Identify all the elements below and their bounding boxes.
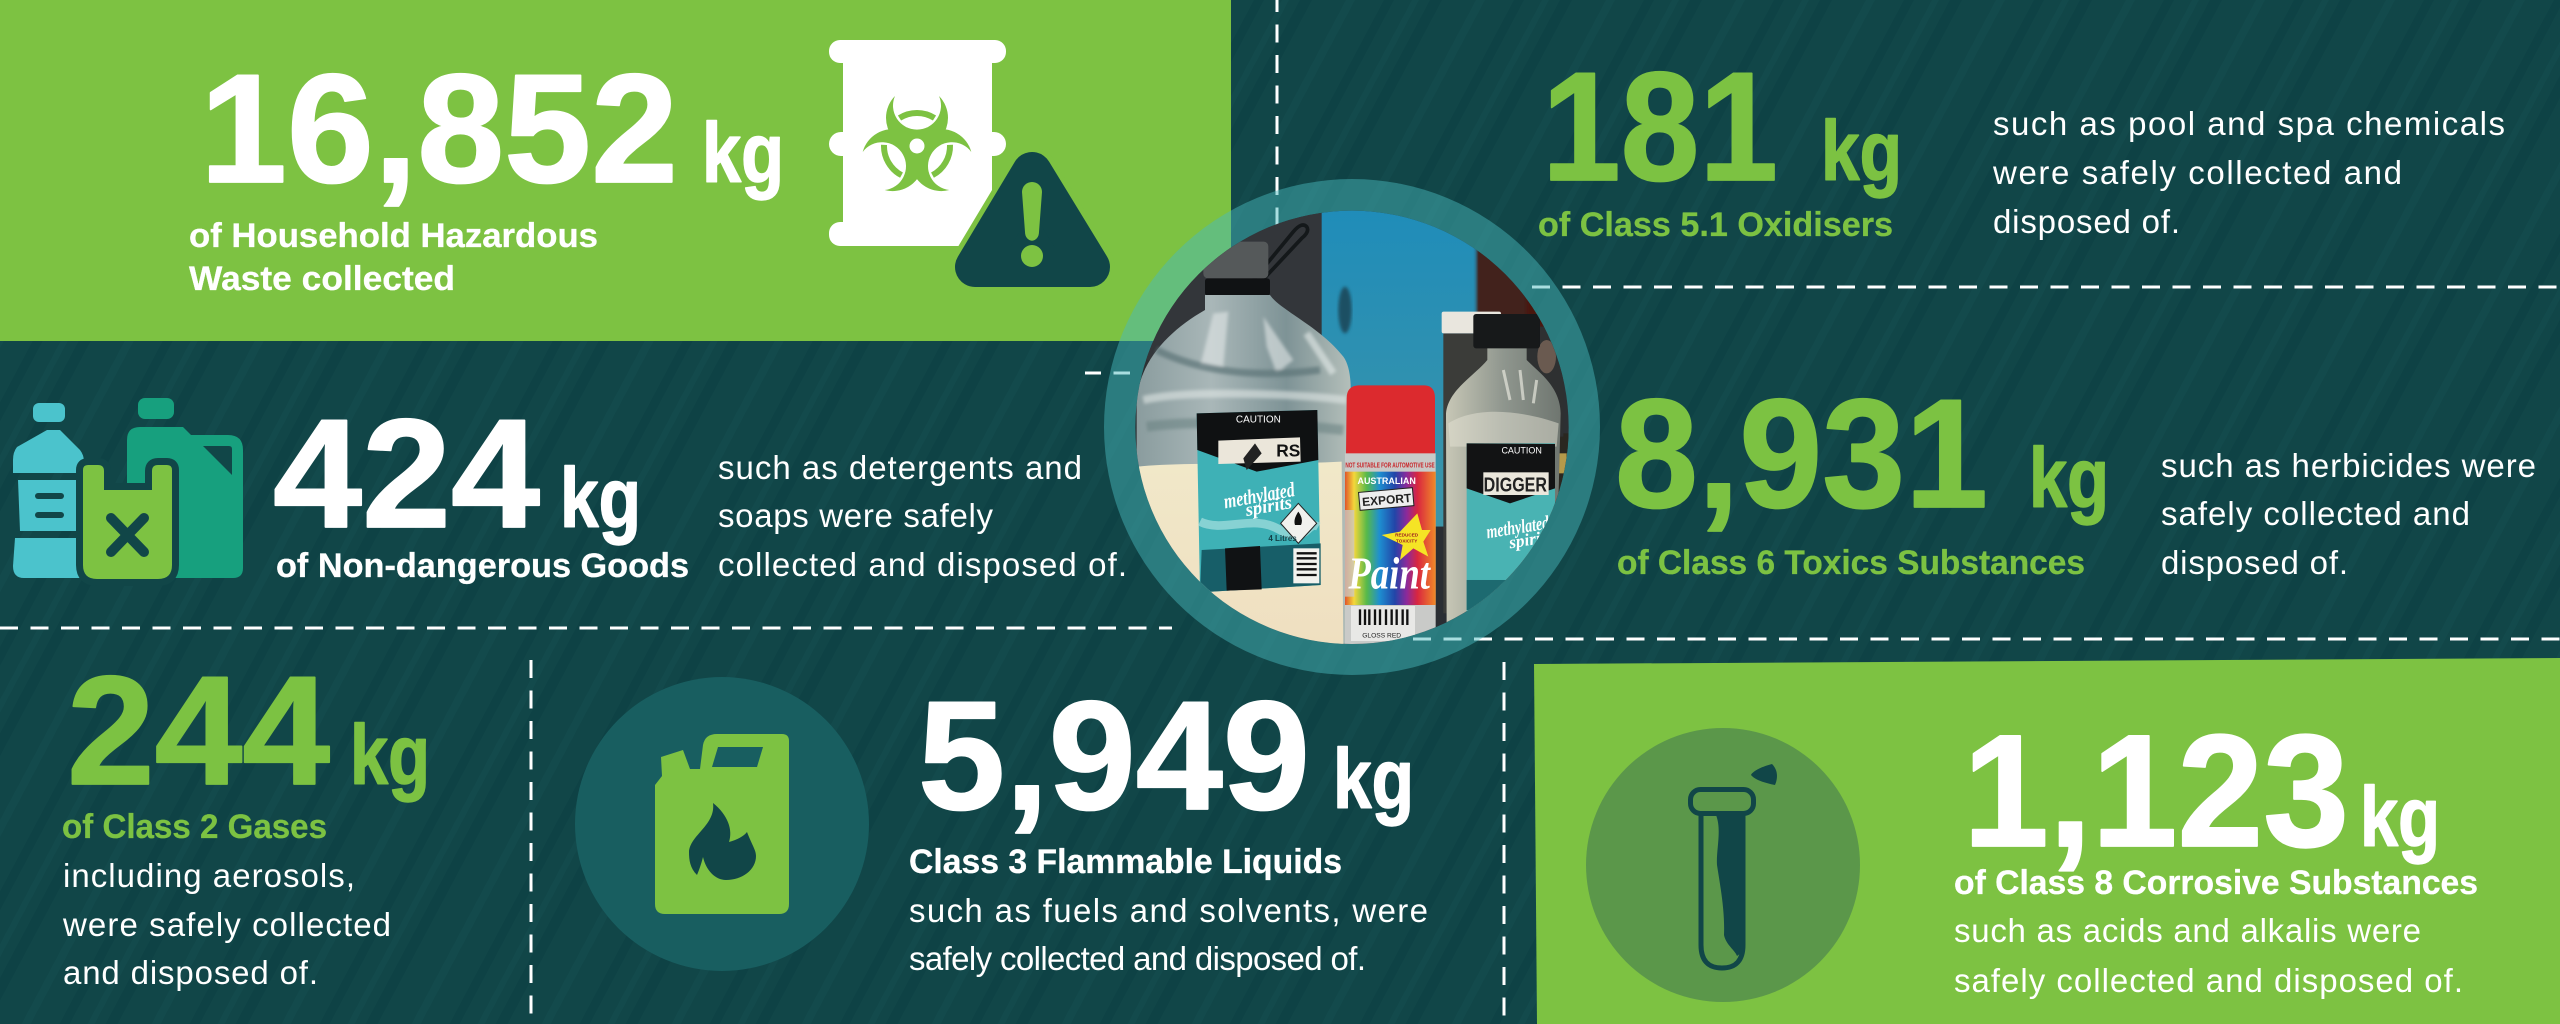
label: household hazardous waste: of Household Hazardous (189, 217, 598, 255)
text: detergents and soaps: collected and disposed of. (718, 546, 1127, 583)
label: class 2 gases: of Class 2 Gases (62, 808, 327, 846)
text: pool and spa chemicals: such as pool and spa chemicals (1993, 105, 2505, 142)
spray can: Paint (1348, 548, 1431, 598)
right bottles (1442, 312, 1563, 633)
figure: 16,852 kg: 16,852 (200, 42, 678, 215)
text: acids and alkalis: such as acids and alkalis were (1954, 912, 2421, 949)
label: non-dangerous goods: of Non-dangerous Goods (276, 547, 689, 585)
figure: 244 kg: 244 (67, 644, 330, 817)
spray can: NOT SUITABLE FOR AUTOMOTIVE USE (1345, 460, 1435, 469)
text: aerosols: and disposed of. (63, 954, 318, 991)
spray can: TOXICITY (1396, 538, 1418, 543)
panel: class 2 gases (62, 644, 430, 991)
bottle label: DIGGER (1484, 474, 1547, 496)
text: pool and spa chemicals: disposed of. (1993, 203, 2180, 240)
figure: 1,123 kg: 1,123 (1963, 701, 2349, 880)
text: acids and alkalis: safely collected and disposed of. (1954, 962, 2463, 999)
bottle label: spirits (1507, 527, 1554, 552)
text: herbicides: such as herbicides were (2161, 447, 2536, 484)
text: detergents and soaps: such as detergents and (718, 449, 1082, 486)
figure: 8,931 kg: 8,931 (1615, 367, 1988, 540)
label: household hazardous waste (189, 217, 598, 298)
text: aerosols (62, 857, 391, 991)
central ring (1104, 179, 1600, 675)
text: detergents and soaps: soaps were safely (718, 497, 994, 534)
spray can: REDUCED (1395, 533, 1419, 538)
photo: bottles of methylated spirits and spray paint (1135, 210, 1569, 644)
bottle label (1467, 443, 1555, 613)
icon: warning triangle (975, 172, 1090, 267)
text: aerosols: including aerosols, (63, 857, 355, 894)
jug label: RS (1276, 441, 1300, 461)
label: class 8 corrosive substances: of Class 8 Corrosive Substances (1954, 864, 2478, 902)
big jug (1137, 225, 1351, 647)
text: pool and spa chemicals (1992, 105, 2505, 240)
panel: class 8 corrosive substances (1534, 658, 2560, 1024)
label: class 5.1 oxidisers: of Class 5.1 Oxidisers (1538, 206, 1893, 244)
figure: 424 kg: kg (560, 451, 641, 545)
icon: jerry can with flame (575, 677, 869, 971)
text: herbicides: disposed of. (2161, 544, 2348, 581)
label: household hazardous waste: Waste collected (189, 260, 455, 298)
icon: test tube (1586, 728, 1860, 1002)
figure: 5,949 kg: kg (1333, 732, 1414, 826)
figure: 8,931 kg: kg (2029, 431, 2109, 525)
icon: biohazard barrel (829, 40, 1006, 246)
panel: household hazardous waste (0, 0, 1231, 341)
spray can (1345, 385, 1436, 647)
jug label: methylated (1222, 479, 1297, 513)
text: fuels and solvents: such as fuels and solvents, were (909, 892, 1428, 929)
text: herbicides: safely collected and (2161, 495, 2470, 532)
label: class 6 toxics substances: of Class 6 Toxics Substances (1617, 544, 2085, 582)
text: fuels and solvents (909, 892, 1428, 977)
panel: class 5.1 oxidisers (1538, 40, 2505, 244)
text: acids and alkalis (1954, 912, 2463, 999)
spray can: AUSTRALIAN (1357, 476, 1416, 486)
text: aerosols: were safely collected (62, 906, 391, 943)
text: pool and spa chemicals: were safely collected and (1992, 154, 2402, 191)
text: fuels and solvents: safely collected and disposed of. (909, 940, 1366, 977)
jug label: CAUTION (1236, 414, 1281, 425)
spray can: EXPORT (1362, 491, 1412, 509)
jug label: spirits (1243, 492, 1293, 521)
figure: 244 kg: kg (350, 708, 430, 802)
text: detergents and soaps (718, 449, 1127, 583)
panel: class 6 toxics (1615, 367, 2536, 582)
bottle label: CAUTION (1501, 445, 1542, 455)
figure: 1,123 kg: kg (2360, 770, 2440, 864)
jug label (1197, 410, 1321, 592)
icon: bottle, jug and bag (13, 398, 243, 579)
figure: 16,852 kg: kg (702, 106, 784, 200)
figure: 181 kg: kg (1821, 104, 1902, 198)
jug label: 4 Litres (1268, 534, 1297, 543)
panel: non-dangerous goods (13, 387, 1127, 585)
bottle label: methylated (1485, 513, 1551, 543)
spray can: GLOSS RED (1362, 632, 1401, 639)
label: class 3 flammable liquids: Class 3 Flammable Liquids (909, 843, 1342, 881)
panel: class 3 flammable liquids (575, 669, 1428, 977)
text: herbicides (2161, 447, 2536, 581)
figure: 181 kg: 181 (1542, 40, 1778, 213)
figure: 424 kg: 424 (273, 387, 540, 560)
figure: 5,949 kg: 5,949 (918, 669, 1310, 842)
